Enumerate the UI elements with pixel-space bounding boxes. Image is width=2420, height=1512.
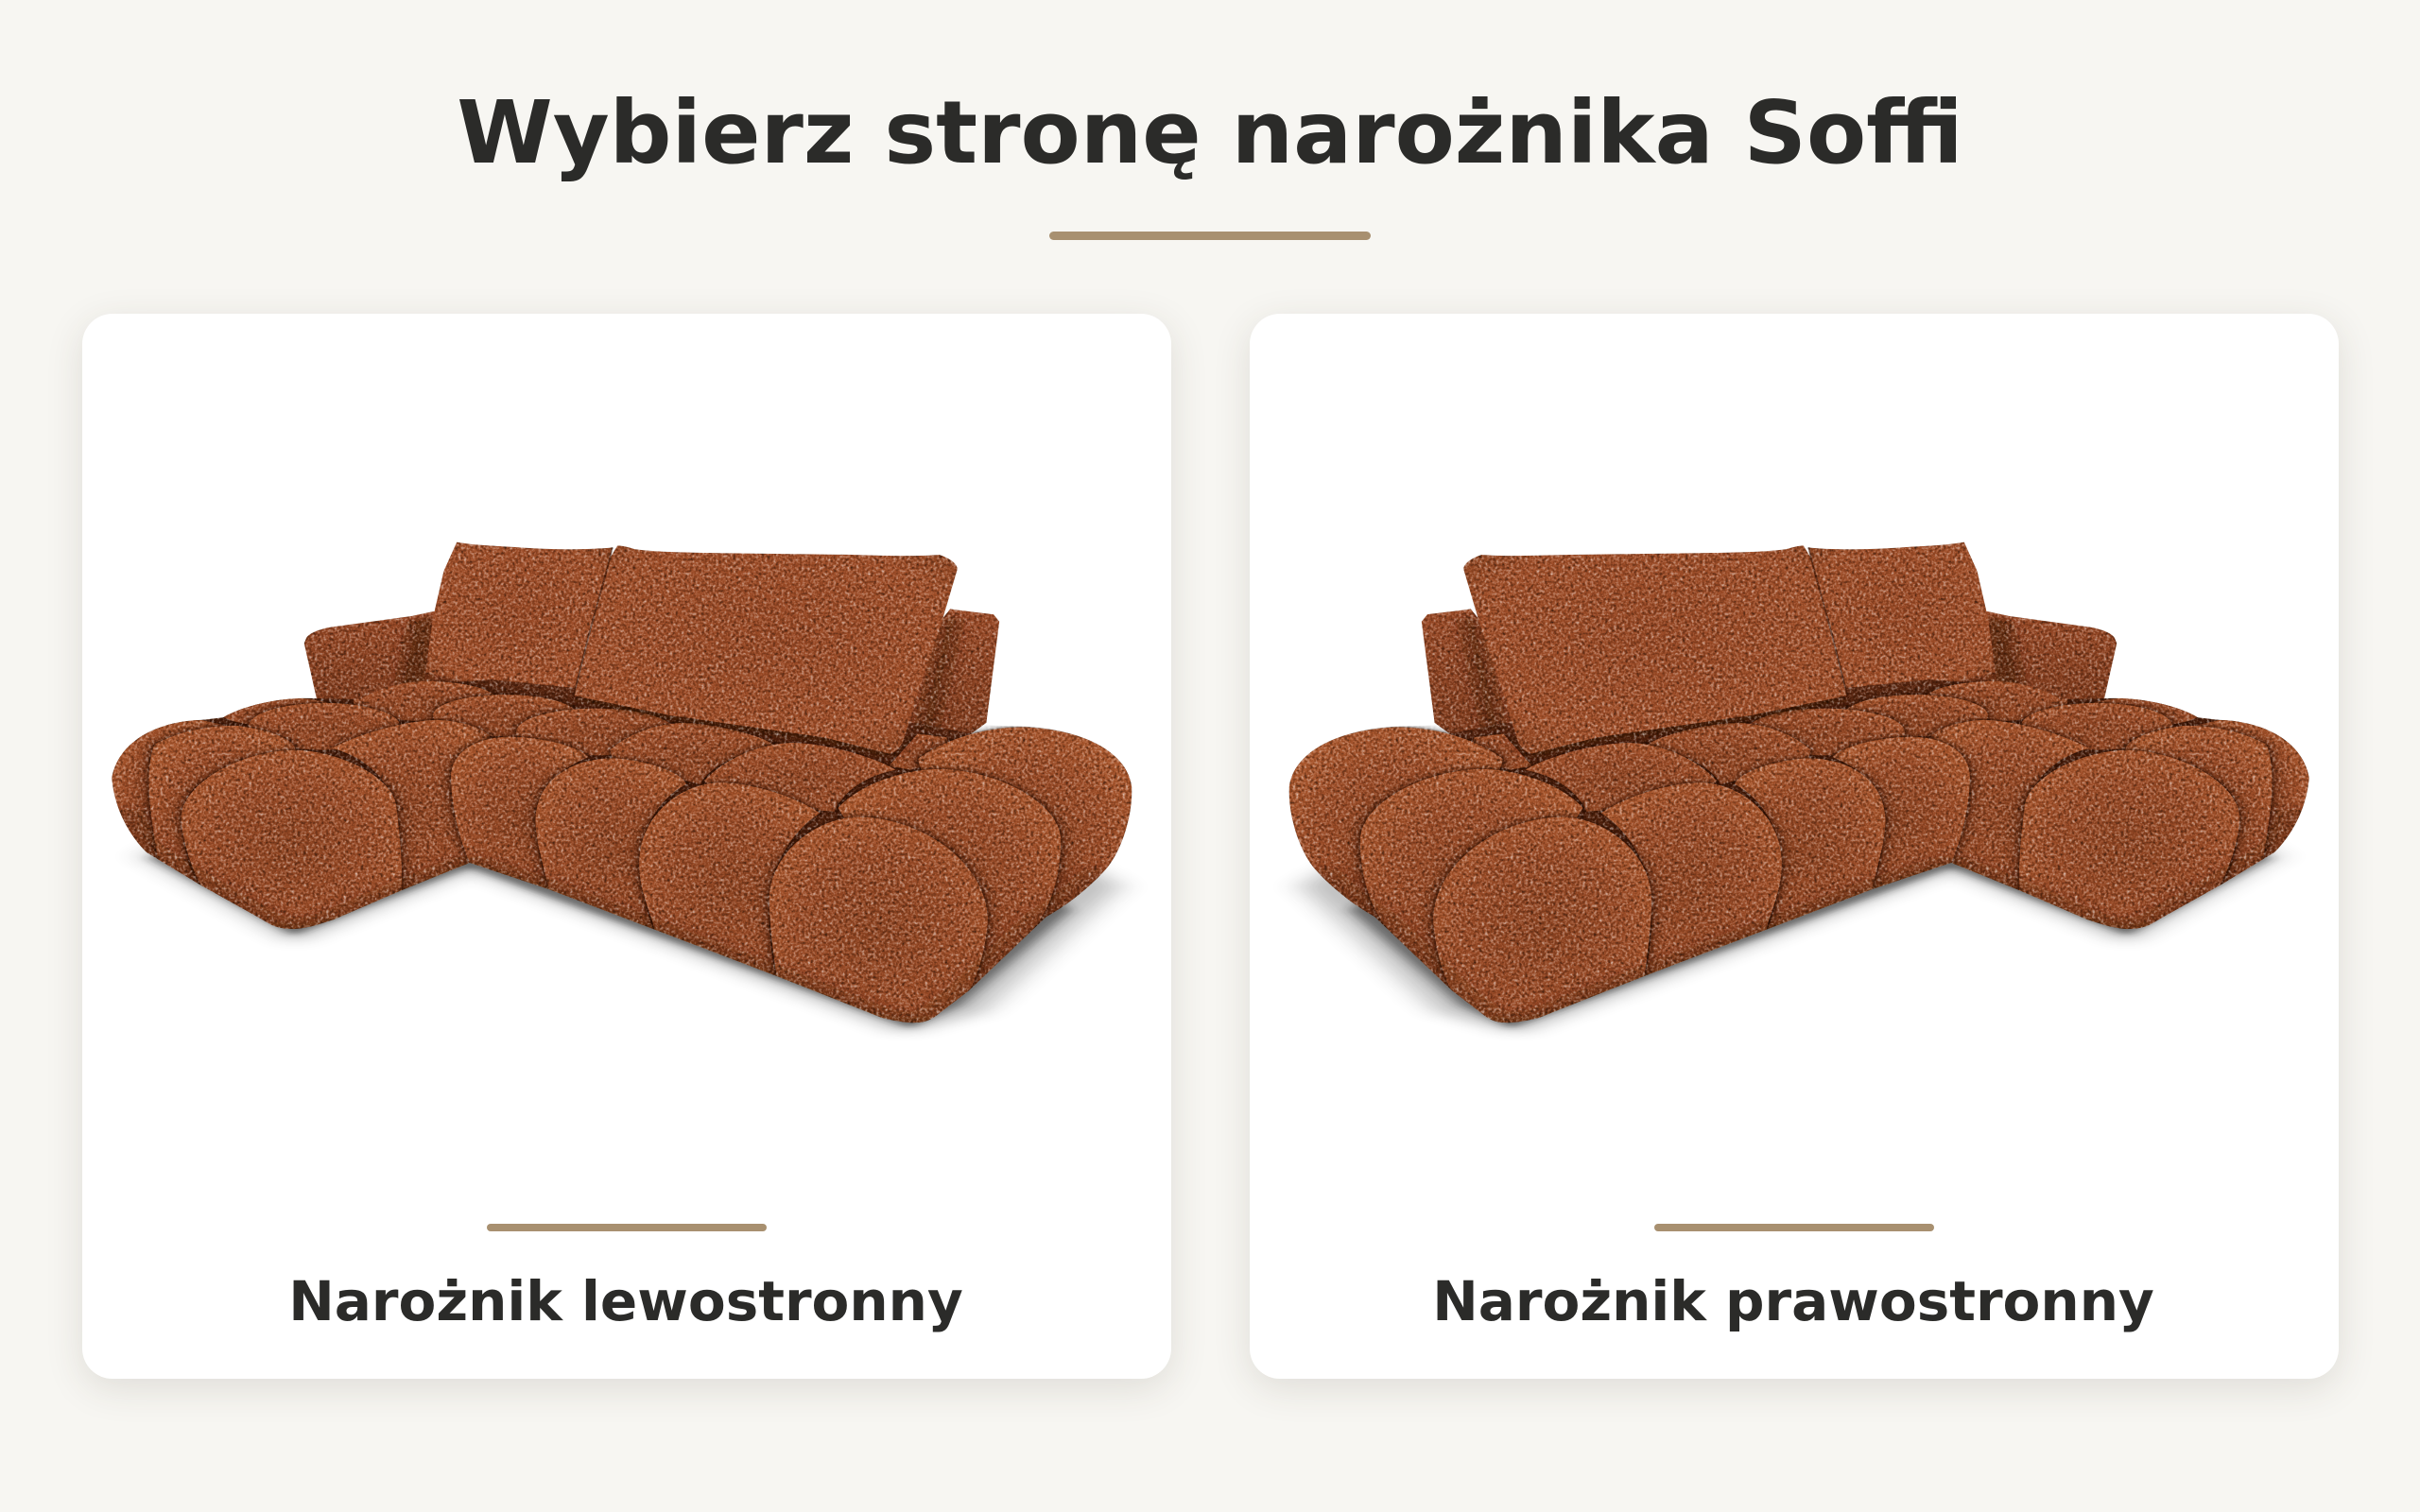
title: Wybierz stronę narożnika Soffi xyxy=(457,82,1963,183)
accent bar xyxy=(1654,1224,1934,1231)
caption: Narożnik lewostronny xyxy=(288,1269,963,1333)
accent bar xyxy=(487,1224,767,1231)
caption: Narożnik prawostronny xyxy=(1432,1269,2154,1333)
title underline xyxy=(1049,232,1371,240)
illustration: right-hand sofa xyxy=(1288,542,2309,1036)
illustration: left-hand sofa xyxy=(112,542,1132,1036)
panel: left-hand corner sofa xyxy=(82,314,1171,1379)
panel: right-hand corner sofa xyxy=(1250,314,2339,1379)
